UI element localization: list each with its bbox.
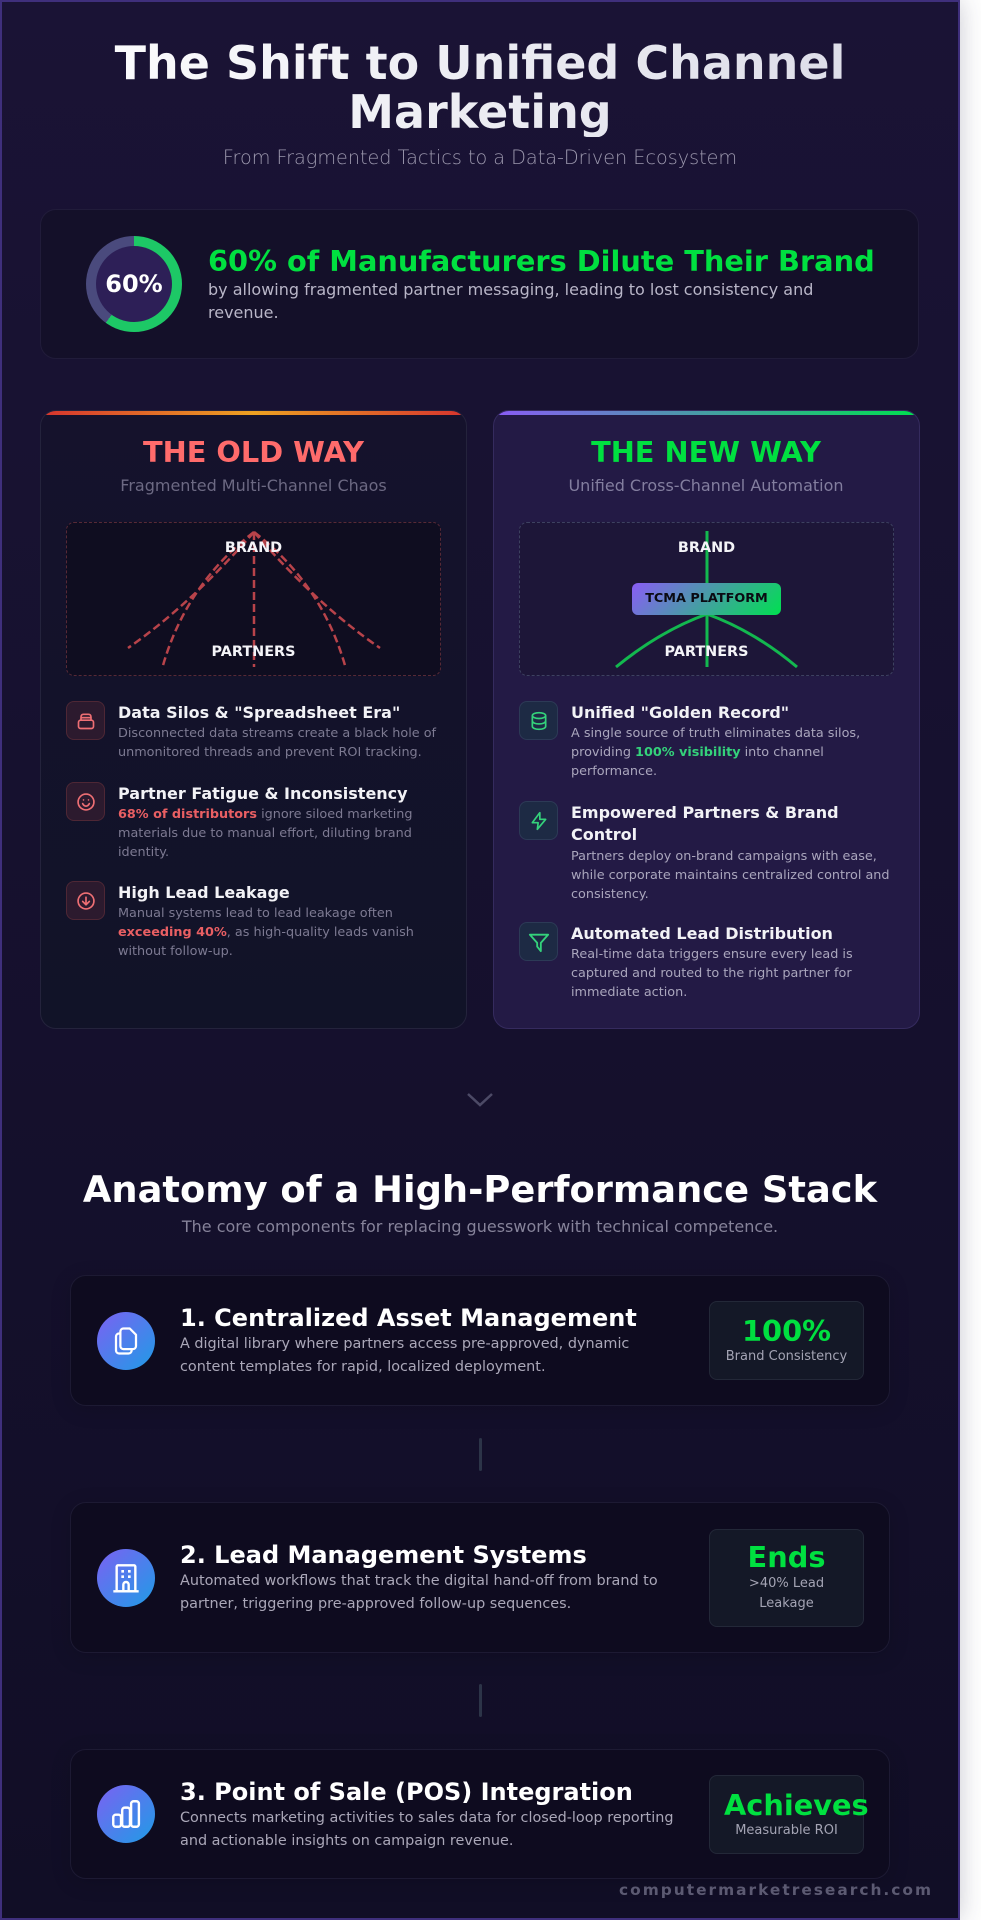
icon: lightning [519, 801, 558, 840]
component text: content templates for rapid, localized deployment. [180, 1359, 546, 1375]
diagram: fragmented lines [66, 522, 441, 676]
item text: Manual systems lead to lead leakage often [118, 906, 393, 921]
stat headline: 60% of Manufacturers Dilute Their Brand [208, 244, 875, 278]
section heading: Anatomy of a High-Performance Stack [83, 1168, 877, 1211]
item title: Automated Lead Distribution [571, 924, 833, 943]
component text: Connects marketing activities to sales data for closed-loop reporting [180, 1810, 673, 1826]
accent bar [41, 411, 466, 415]
item text: performance. [571, 764, 657, 779]
connector line [478, 1684, 482, 1717]
label: partners: PARTNERS [665, 644, 748, 660]
stat description: by allowing fragmented partner messaging, leading to lost consistency and [208, 280, 813, 299]
item text: providing 100% visibility into channel [571, 745, 824, 760]
item text: materials due to manual effort, diluting brand [118, 826, 412, 841]
item text: immediate action. [571, 985, 687, 1000]
stat label: Brand Consistency [726, 1349, 847, 1364]
item title: Control [571, 825, 637, 844]
panel: the new way [493, 410, 920, 1029]
item text: captured and routed to the right partner for [571, 966, 852, 981]
icon: funnel [519, 922, 558, 961]
component text: Automated workflows that track the digital hand-off from brand to [180, 1573, 658, 1589]
stat value: Ends [748, 1540, 825, 1574]
accent bar [494, 411, 919, 415]
stat box: ends [709, 1529, 864, 1627]
stat label: Leakage [759, 1596, 814, 1610]
item text: Partners deploy on-brand campaigns with ease, [571, 848, 877, 864]
item text: A single source of truth eliminates data silos, [571, 726, 860, 741]
panel: key statistic [40, 209, 919, 359]
stat description [208, 280, 813, 322]
label: brand: BRAND [678, 540, 735, 556]
item text [118, 906, 414, 959]
card: asset management [70, 1275, 890, 1406]
item text: unmonitored threads and prevent ROI tracking. [118, 745, 422, 760]
stat value: Achieves [724, 1788, 869, 1822]
item text: consistency. [571, 887, 649, 902]
item: partner fatigue [66, 782, 412, 860]
item text [571, 726, 860, 779]
subtitle: From Fragmented Tactics to a Data-Driven Ecosystem [223, 146, 737, 169]
stat description: revenue. [208, 303, 279, 322]
new way heading: THE NEW WAY [591, 435, 821, 469]
old way heading: THE OLD WAY [143, 435, 364, 469]
icon: inbox [66, 701, 105, 740]
component title: 1. Centralized Asset Management [180, 1304, 637, 1332]
item text: Disconnected data streams create a black hole of [118, 726, 436, 741]
card: lead management [70, 1502, 890, 1653]
diagram: unified platform [519, 522, 894, 676]
platform box: TCMA PLATFORM [645, 591, 768, 606]
card: pos integration [70, 1749, 890, 1879]
item text: exceeding 40%, as high-quality leads vanish [118, 925, 414, 940]
item text: without follow-up. [118, 944, 233, 959]
icon: face [66, 782, 105, 821]
stat label: >40% Lead [749, 1576, 824, 1591]
icon: building [97, 1549, 155, 1607]
stat box: 100% [709, 1301, 864, 1380]
stat label: Measurable ROI [735, 1823, 838, 1838]
component title: 2. Lead Management Systems [180, 1541, 587, 1569]
item text [571, 947, 853, 1000]
item: lead distribution [519, 922, 853, 1000]
footer watermark: computermarketresearch.com [619, 1881, 933, 1899]
new way subtitle: Unified Cross-Channel Automation [568, 476, 844, 495]
donut centre label: 60% [105, 270, 163, 298]
component text: A digital library where partners access pre-approved, dynamic [180, 1336, 629, 1352]
item text: identity. [118, 845, 169, 860]
icon: bar chart [97, 1785, 155, 1843]
item title: Data Silos & "Spreadsheet Era" [118, 703, 400, 722]
component text [180, 1810, 673, 1849]
icon: documents [97, 1312, 155, 1370]
icon: database [519, 701, 558, 740]
component text: and actionable insights on campaign revenue. [180, 1833, 513, 1849]
title [0, 39, 960, 137]
item title: Partner Fatigue & Inconsistency [118, 784, 408, 803]
item: golden record [519, 701, 860, 779]
item title: High Lead Leakage [118, 883, 290, 902]
item text [118, 807, 412, 860]
platform box [632, 583, 781, 615]
stat value: 100% [742, 1314, 831, 1348]
donut centre label [96, 246, 172, 322]
old way subtitle: Fragmented Multi-Channel Chaos [120, 476, 387, 495]
item text: 68% of distributors ignore siloed marketing [118, 807, 412, 822]
component text: partner, triggering pre-approved follow-up sequences. [180, 1596, 571, 1612]
donut chart: 60% [86, 236, 182, 332]
item text: while corporate maintains centralized control and [571, 868, 890, 883]
title: Marketing [348, 85, 612, 139]
arrow: chevron down [467, 1093, 493, 1106]
item: lead leakage [66, 881, 414, 959]
item title: Unified "Golden Record" [571, 703, 789, 722]
stat label [749, 1576, 824, 1610]
component text [180, 1336, 629, 1375]
component title: 3. Point of Sale (POS) Integration [180, 1778, 633, 1806]
panel: the old way [40, 410, 467, 1029]
section subtitle: The core components for replacing guesswork with technical competence. [182, 1216, 778, 1236]
label: brand: BRAND [225, 540, 282, 556]
component text [180, 1573, 658, 1612]
item title: Empowered Partners & Brand [571, 803, 839, 822]
item text [118, 726, 436, 760]
connector line [478, 1438, 482, 1471]
item: data silos [66, 701, 436, 760]
stat box: achieves [709, 1775, 864, 1854]
label: partners: PARTNERS [212, 644, 295, 660]
title: The Shift to Unified Channel [115, 36, 845, 90]
item title [571, 803, 839, 844]
item text: Real-time data triggers ensure every lead is [571, 947, 853, 962]
icon: arrow down circle [66, 881, 105, 920]
item text [571, 848, 890, 902]
item: empowered partners [519, 801, 890, 902]
